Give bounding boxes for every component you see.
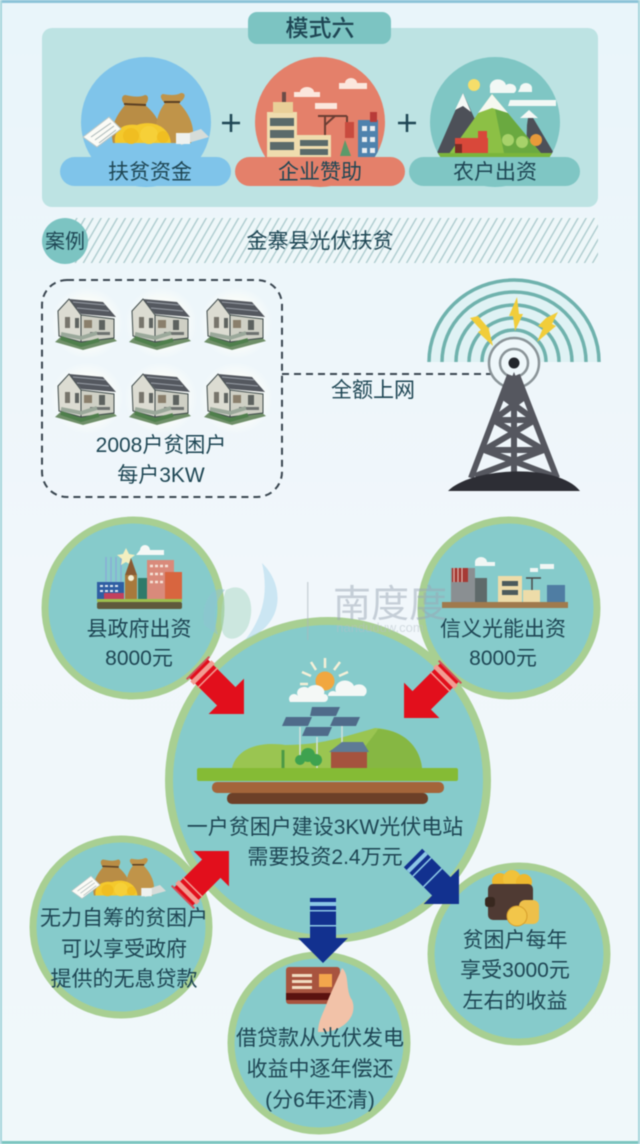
icon: plus one [222,114,240,132]
panel: households [42,280,282,497]
panel: funding sources [42,28,598,207]
icon: enterprise buildings [255,57,385,187]
loan text line 1: 无力自筹的贫困户 [40,907,208,930]
circle: free loans [33,839,209,1015]
circle: solar station [169,621,487,939]
county amount: 8000元 [105,647,173,670]
icon: city [97,545,182,609]
icon: card in hand [286,967,353,1032]
Xinyi text: 信义光能出资 [440,618,566,641]
pill: enterprise [235,157,405,186]
loan text line 3: 提供的无息贷款 [50,968,198,991]
arrow: station to repayment [298,898,348,963]
icon: mountains and farm [430,57,560,187]
icon: plus two [398,114,416,132]
pill: funding [60,157,231,186]
county text: 县政府出资 [86,618,192,641]
icon: funding money bags [81,57,211,187]
pill: farmers [409,157,580,186]
icon: loan money bags [72,858,166,898]
label: funding: 扶贫资金 [108,161,192,184]
label: full grid connection: 全额上网 [331,379,415,402]
label: farmers: 农户出资 [453,161,537,184]
circle: repayment [231,955,407,1131]
icon: transmission tower [429,280,599,491]
icon: solar farm island [197,658,458,804]
income text line 2: 享受3000元 [460,959,570,982]
arrow: Xinyi to station [386,654,468,736]
repayment text line 3: (分6年还清) [265,1089,375,1112]
loan text line 2: 可以享受政府 [61,938,187,961]
repayment text line 1: 借贷款从光伏发电 [236,1027,404,1050]
income text line 3: 左右的收益 [462,990,568,1013]
circle: county government [45,520,221,696]
Xinyi amount: 8000元 [469,647,537,670]
title: mode six: 模式六 [286,15,354,41]
station text line 1: 一户贫困户建设3KW光伏电站 [187,816,463,839]
icon: factory [442,557,568,608]
circle: Xinyi solar [421,520,597,696]
label: enterprise: 企业赞助 [278,161,362,184]
arrow: station to income [395,840,477,922]
station text line 2: 需要投资2.4万元 [247,846,403,869]
connector: dashed line [282,373,505,375]
watermark: nanduduw.com [336,620,424,635]
arrow: county to station [180,650,262,732]
repayment text line 2: 收益中逐年偿还 [246,1058,394,1081]
household count: 2008户贫困户 [96,434,226,457]
title: mode six [248,12,391,44]
income text line 1: 贫困户每年 [462,929,568,952]
icon: wallet with coins [485,870,539,926]
capacity per household: 每户3KW [117,464,205,487]
watermark [203,563,447,640]
arrow: loans to station [165,833,247,915]
watermark: 南度度 [333,584,447,626]
circle: annual income [431,866,607,1042]
case banner: 案例 [45,230,85,253]
case banner: 金寨县光伏扶贫 [246,230,394,253]
icon: houses [51,287,272,434]
case banner [42,218,598,264]
